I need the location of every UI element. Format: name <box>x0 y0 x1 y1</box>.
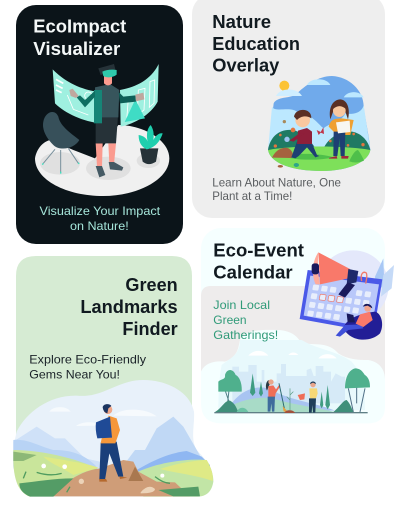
subtitle: Visualize Your Impact: on Nature! <box>70 219 129 233</box>
heading: Green Landmarks Finder: Landmarks <box>80 297 178 317</box>
subtitle: Explore Eco-Friendly: Explore Eco-Friendly <box>29 352 146 366</box>
subtitle: Explore Eco-Friendly <box>29 352 146 381</box>
subtitle: Join Local Green Gatherings: Join Local <box>213 298 270 312</box>
card background green <box>16 256 192 440</box>
card background grey <box>192 0 385 218</box>
panel: Green Landmarks Finder <box>13 256 213 497</box>
heading: Eco-Event Calendar: Eco-Event <box>213 241 304 261</box>
subtitle: Visualize Your Impact: Visualize Your Impact <box>40 204 161 218</box>
card background dark <box>16 5 183 244</box>
heading: EcoImpact Visualizer: EcoImpact <box>33 17 126 37</box>
card background pale with grey band <box>201 228 385 423</box>
heading: Eco-Event Calendar <box>213 241 304 282</box>
heading: Green Landmarks Finder <box>80 275 178 339</box>
subtitle: Join Local Green Gatherings: Green <box>213 313 247 327</box>
panel: Eco-Event Calendar <box>201 228 394 423</box>
subtitle: Learn About Nature: Learn About Nature, One <box>212 176 341 190</box>
heading: EcoImpact Visualizer <box>33 17 126 59</box>
heading: Nature Education Overlay <box>212 12 300 76</box>
heading: Nature Education Overlay: Nature <box>212 12 271 32</box>
subtitle: Join Local Green Gatherings: Gatherings! <box>213 328 278 342</box>
heading: Green Landmarks Finder: Green <box>125 275 178 295</box>
illustration: calendar with megaphone and reader <box>300 250 394 340</box>
subtitle: Explore Eco-Friendly: Gems Near You! <box>29 367 120 381</box>
panel: Nature Education Overlay <box>192 0 385 218</box>
illustration: hiker on mountain landscape <box>13 380 213 497</box>
subtitle: Visualize Your Impact <box>40 204 161 233</box>
illustration: VR user with floating screens <box>35 64 169 196</box>
subtitle: Learn About Nature <box>212 176 341 203</box>
heading: EcoImpact Visualizer: Visualizer <box>33 39 120 59</box>
heading: Nature Education Overlay: Overlay <box>212 56 279 76</box>
illustration: park planting scene <box>201 330 385 423</box>
subtitle: Learn About Nature: Plant at a Time! <box>212 189 292 203</box>
panel: EcoImpact Visualizer <box>16 5 183 244</box>
heading: Eco-Event Calendar: Calendar <box>213 262 293 282</box>
heading: Nature Education Overlay: Education <box>212 34 300 54</box>
heading: Green Landmarks Finder: Finder <box>122 319 178 339</box>
illustration: children studying nature <box>268 76 370 171</box>
subtitle: Join Local Green Gatherings <box>213 298 278 342</box>
